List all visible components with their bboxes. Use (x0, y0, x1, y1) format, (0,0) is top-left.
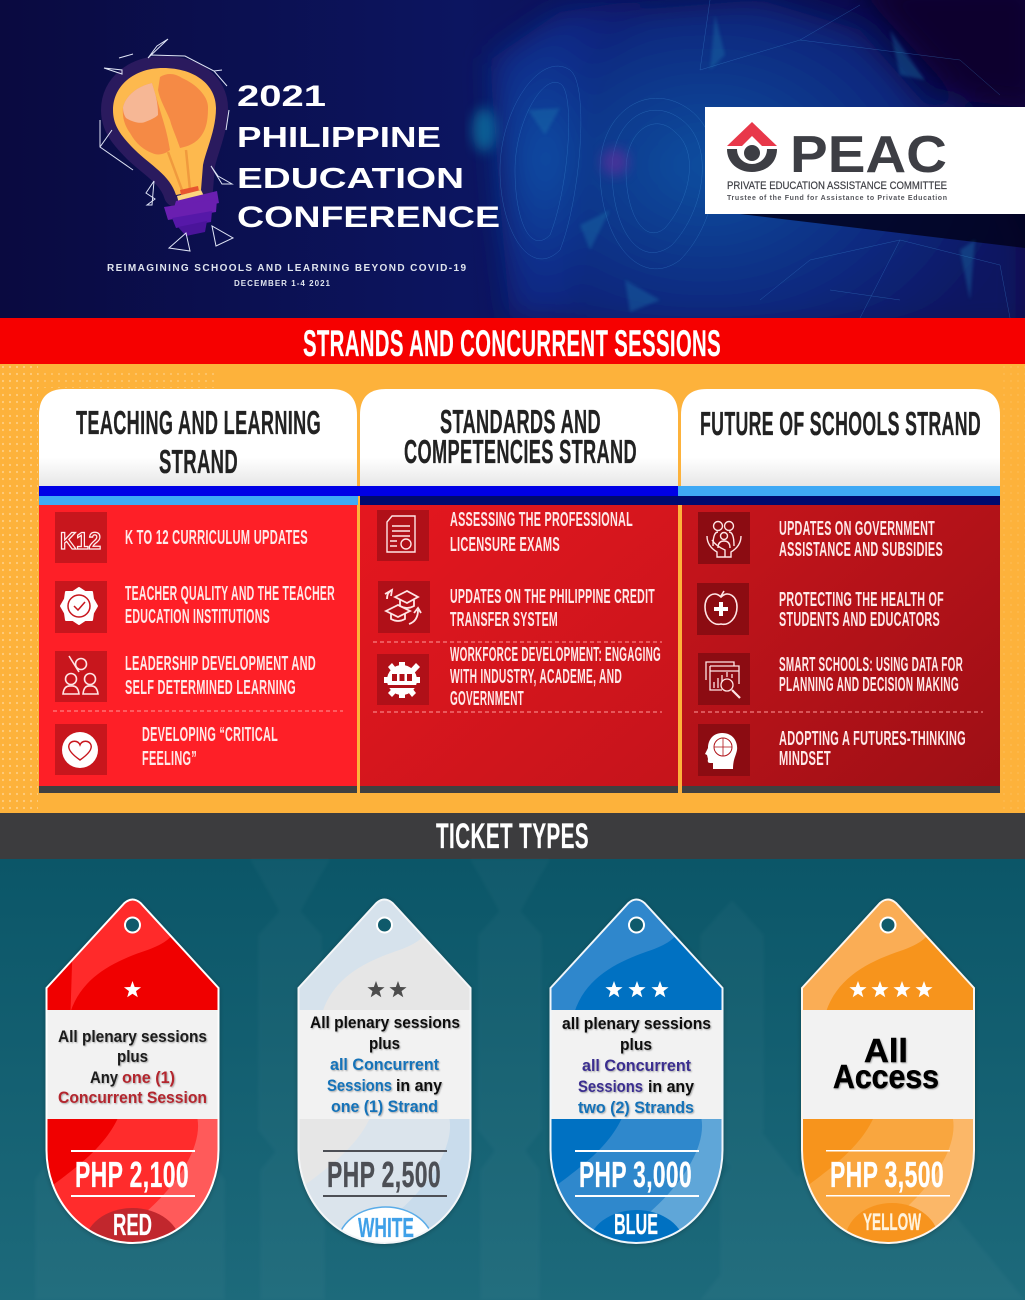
tier name: RED (113, 1207, 152, 1242)
panel: standards and competencies strand: WORKFORCE DEVELOPMENT: ENGAGING (450, 644, 661, 666)
icon: heart (55, 724, 107, 775)
text: licensure exams: LICENSURE EXAMS (450, 534, 560, 556)
icon: apple with cross (697, 583, 749, 635)
tag description: plus (620, 1036, 652, 1054)
tag description (562, 1015, 711, 1117)
text: futures thinking (779, 728, 966, 770)
ticket section background (0, 859, 1025, 1300)
tag description: All plenary sessions (58, 1028, 207, 1046)
PEAC logo panel (705, 107, 1025, 214)
heading: teaching and learning: STRAND (159, 443, 238, 480)
icon: leadership group (55, 651, 107, 702)
PEAC logo panel: PEAC (790, 126, 947, 184)
text: workforce development: WITH INDUSTRY, ACADEME, AND (450, 666, 622, 688)
price: PHP 2,500 (327, 1154, 441, 1195)
price: PHP 2,100 (75, 1154, 189, 1195)
tag description: All plenary sessions (310, 1014, 460, 1032)
text: teacher quality: EDUCATION INSTITUTIONS (125, 606, 270, 628)
section banner: ticket types: TICKET TYPES (436, 817, 589, 856)
panel: teaching and learning strand (39, 389, 358, 793)
price: PHP 3,000 (579, 1154, 692, 1195)
price (323, 1150, 447, 1197)
text: teacher quality: TEACHER QUALITY AND THE TEACHER (125, 583, 335, 605)
tagline and date: REIMAGINING SCHOOLS AND LEARNING BEYOND COVID-19 (107, 263, 466, 274)
PEAC logo panel: PRIVATE EDUCATION ASSISTANCE COMMITTEE (727, 180, 947, 192)
tagline and date (107, 263, 466, 288)
ticket: blue (548, 898, 725, 1246)
text: licensure exams (450, 509, 633, 556)
text: workforce development (450, 644, 661, 710)
text: credit transfer (450, 586, 655, 631)
tag body (548, 898, 725, 1246)
text: health (779, 589, 944, 631)
header banner (0, 0, 1025, 330)
title: EDUCATION (237, 163, 464, 195)
tag description: two (2) Strands (578, 1099, 694, 1117)
tier name: YELLOW (863, 1209, 921, 1236)
tag description: all Concurrent (582, 1057, 691, 1075)
text: teacher quality (125, 583, 335, 628)
text: smart schools (779, 654, 963, 696)
text: leadership: LEADERSHIP DEVELOPMENT AND (125, 653, 316, 675)
tag description: all Concurrent (330, 1056, 439, 1074)
tag body (296, 898, 473, 1246)
title: 2021 (237, 80, 326, 113)
text: leadership (125, 653, 316, 699)
tag description (58, 1028, 207, 1107)
strands section background (0, 364, 1025, 813)
price (575, 1150, 699, 1197)
icon: head with globe (698, 724, 750, 776)
panel: standards and competencies strand (358, 389, 678, 793)
price (826, 1150, 950, 1196)
heading: standards and competencies: COMPETENCIES STRAND (404, 433, 637, 470)
panel: future of schools strand (678, 389, 1000, 793)
icon: data analysis (698, 653, 750, 705)
text: leadership: SELF DETERMINED LEARNING (125, 677, 296, 699)
text: critical feeling (142, 724, 278, 770)
heading: teaching and learning (76, 404, 321, 480)
tag body (44, 898, 221, 1246)
tag description: one (1) Strand (331, 1098, 438, 1116)
tag description: All (864, 1032, 908, 1069)
title: PHILIPPINE (237, 122, 441, 154)
PEAC logo panel: Trustee of the Fund for Assistance to Private Education (727, 195, 947, 202)
tag description: Any (90, 1069, 119, 1087)
text: critical feeling: FEELING” (142, 748, 197, 770)
tag body (800, 898, 976, 1246)
section banner: strands (0, 318, 1025, 364)
ticket: yellow (800, 898, 976, 1246)
tier name: WHITE (358, 1212, 414, 1243)
tag description: Sessions (327, 1077, 392, 1095)
icon: credit transfer caps (378, 581, 430, 633)
tag description: plus (117, 1048, 148, 1066)
title: CONFERENCE (237, 201, 500, 234)
tier name: BLUE (614, 1209, 658, 1241)
icon: quality badge (55, 581, 107, 633)
section banner: ticket types (0, 813, 1025, 859)
icon: workforce gear (377, 654, 429, 705)
heading: standards and competencies: STANDARDS AND (440, 403, 601, 440)
text: credit transfer: UPDATES ON THE PHILIPPINE CREDIT (450, 586, 655, 608)
heading: standards and competencies (404, 403, 637, 470)
text: workforce development: GOVERNMENT (450, 688, 524, 710)
text: critical feeling: DEVELOPING “CRITICAL (142, 724, 278, 746)
icon: light bulb with brain (100, 39, 233, 251)
text: K to 12: K TO 12 CURRICULUM UPDATES (125, 527, 308, 549)
icon: family in hands (698, 512, 750, 564)
tag description: plus (369, 1035, 400, 1053)
tag description: one (1) (122, 1069, 175, 1087)
text: government assistance (779, 518, 943, 561)
tag description: Access (833, 1058, 939, 1095)
icon: K12 (55, 512, 107, 563)
text: licensure exams: ASSESSING THE PROFESSIONAL (450, 509, 633, 531)
tag description (310, 1014, 460, 1116)
ticket: red (44, 898, 221, 1246)
tagline and date: DECEMBER 1-4 2021 (234, 279, 331, 288)
tag description: in any (396, 1077, 443, 1095)
tag description (833, 1032, 939, 1095)
icon: K12: K12 (60, 528, 101, 555)
title (237, 80, 500, 234)
price: PHP 3,500 (830, 1154, 944, 1195)
tag description: Sessions (578, 1078, 643, 1096)
tag description: all plenary sessions (562, 1015, 711, 1033)
heading: teaching and learning: TEACHING AND LEARNING (76, 404, 321, 441)
text: credit transfer: TRANSFER SYSTEM (450, 609, 558, 631)
tag description: Concurrent Session (58, 1089, 207, 1107)
icon: exam document (377, 510, 429, 561)
price (71, 1150, 195, 1197)
tag description: in any (648, 1078, 695, 1096)
text: futures thinking: MINDSET (779, 748, 831, 770)
ticket: white (296, 898, 473, 1246)
